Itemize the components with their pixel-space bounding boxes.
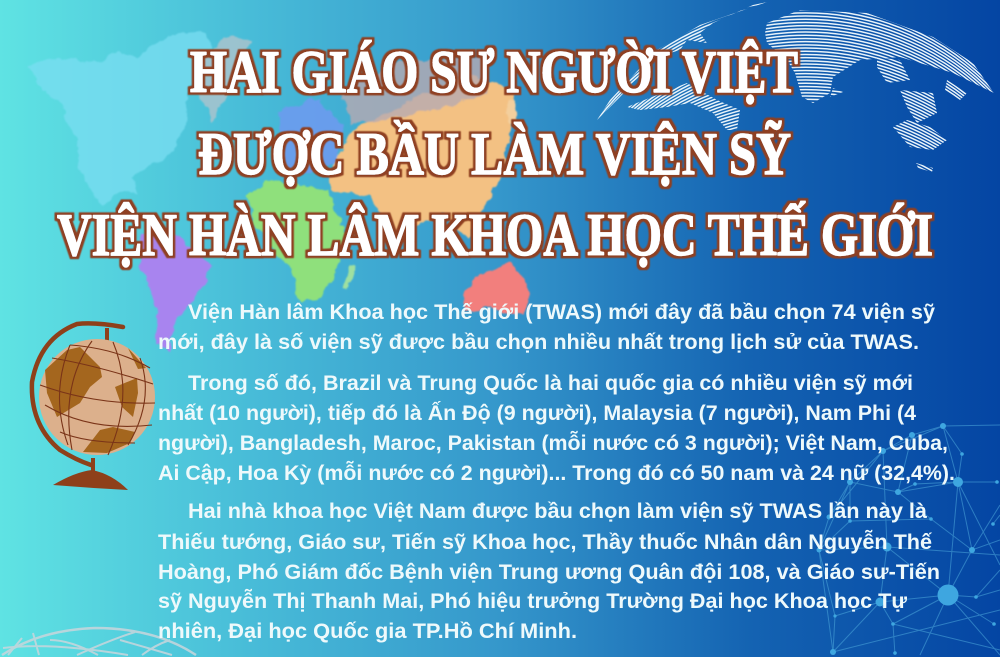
- paragraph 2: người), Bangladesh, Maroc, Pakistan (mỗi nước có 3 người); Việt Nam, Cuba,: [158, 431, 948, 455]
- paragraph 3: nhiên, Đại học Quốc gia TP.Hồ Chí Minh.: [158, 620, 577, 643]
- body text: [158, 301, 955, 643]
- globe grid: [40, 341, 155, 455]
- paragraph 2: Ai Cập, Hoa Kỳ (mỗi nước có 2 người)... Trong đó có 50 nam và 24 nữ (32,4%).: [158, 461, 955, 485]
- watercolor world map: [30, 32, 530, 352]
- paragraph 1: Viện Hàn lâm Khoa học Thế giới (TWAS) mới đây đã bầu chọn 74 viện sỹ: [188, 301, 935, 324]
- paragraph 3: Hoàng, Phó Giám đốc Bệnh viện Trung ương Quân đội 108, và Giáo sư-Tiến: [158, 561, 940, 584]
- striped globe top right: [597, 2, 994, 172]
- map: Africa: [248, 180, 346, 302]
- wire globe bottom left: [2, 628, 196, 655]
- paragraph 3: sỹ Nguyễn Thị Thanh Mai, Phó hiệu trưởng Trường Đại học Khoa học Tự: [158, 589, 908, 613]
- globe continents: [45, 347, 102, 417]
- map: Europe: [276, 98, 345, 176]
- icon: desk globe: [32, 323, 155, 490]
- paragraph 2: Trong số đó, Brazil và Trung Quốc là hai quốc gia có nhiều viện sỹ mới: [188, 372, 913, 395]
- map: Greenland: [198, 36, 250, 122]
- paragraph 1: [158, 301, 935, 354]
- paragraph 3: Hai nhà khoa học Việt Nam được bầu chọn làm viện sỹ TWAS lần này là: [188, 500, 927, 523]
- title: ĐƯỢC BẦU LÀM VIỆN SỸ: [198, 121, 791, 187]
- map: Australia: [463, 262, 530, 316]
- network graphic bottom right: [816, 423, 1000, 655]
- title: HAI GIÁO SƯ NGƯỜI VIỆT: [190, 39, 798, 105]
- map: South America: [140, 234, 212, 352]
- map: Northern Asia tint: [340, 56, 490, 125]
- title: [57, 39, 933, 268]
- paragraph 2: nhất (10 người), tiếp đó là Ấn Độ (9 người), Malaysia (7 người), Nam Phi (4: [158, 402, 916, 425]
- paragraph 1: mới, đây là số viện sỹ được bầu chọn nhiều nhất trong lịch sử của TWAS.: [158, 331, 919, 354]
- map: Japan: [507, 98, 518, 124]
- paragraph 3: [158, 500, 940, 643]
- map: Madagascar: [344, 264, 356, 287]
- globe stand arm: [32, 323, 123, 465]
- map: North America: [30, 32, 212, 205]
- map: Asia: [330, 75, 515, 240]
- globe base: [53, 470, 128, 490]
- paragraph 3: Thiếu tướng, Giáo sư, Tiến sỹ Khoa học, Thầy thuốc Nhân dân Nguyễn Thế: [158, 530, 932, 554]
- paragraph 2: [158, 372, 955, 485]
- globe sphere: [39, 339, 155, 455]
